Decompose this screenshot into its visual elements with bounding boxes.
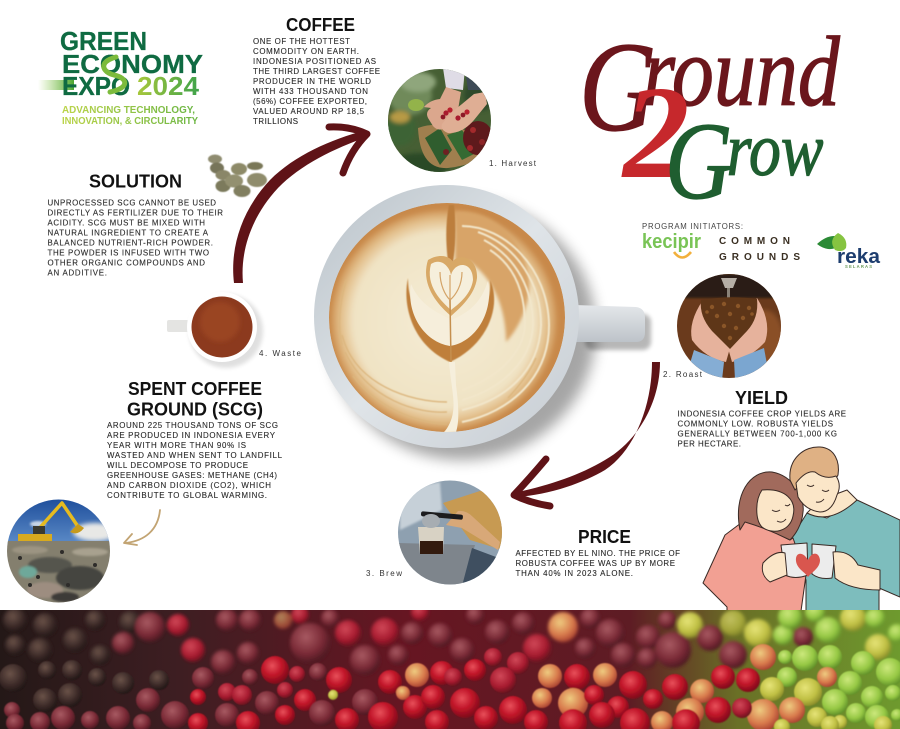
text block: solution: NATURAL INGREDIENT TO CREATE A: [48, 228, 209, 238]
text block: price: [516, 549, 680, 578]
arrow: roast to brew: [514, 362, 660, 506]
text block: coffee: INDONESIA POSITIONED AS: [253, 57, 376, 66]
text block: solution: UNPROCESSED SCG CANNOT BE USED: [48, 198, 216, 208]
label: waste: 4. Waste: [259, 349, 302, 358]
title: Ground 2 Grow: G: [665, 101, 733, 223]
label: harvest: 1. Harvest: [489, 159, 537, 168]
illustration: couple with mugs: [703, 447, 900, 611]
text block: coffee: ONE OF THE HOTTEST: [253, 37, 350, 46]
text block: spent coffee ground: WASTED AND WHEN SENT TO LANDFILL: [107, 451, 283, 460]
text block: coffee: (56%) COFFEE EXPORTED,: [253, 97, 367, 106]
logo: Green Economy Expo 2024: ADVANCING TECHNOLOGY,: [62, 104, 195, 116]
text block: yield: INDONESIA COFFEE CROP YIELDS ARE: [678, 410, 846, 418]
photo strip: coffee cherries: [0, 602, 900, 729]
text block: price: THAN 40% IN 2023 ALONE.: [516, 569, 633, 578]
logo: kecipir: kecipir: [642, 231, 701, 253]
text block: solution: DIRECTLY AS FERTILIZER DUE TO THEIR: [48, 208, 223, 218]
text block: spent coffee ground: YEAR WITH MORE THAN 90% IS: [107, 441, 246, 450]
logo: reka: [817, 233, 881, 269]
photo: waste coffee grounds cup: [167, 292, 263, 368]
mugs and heart: [781, 543, 808, 578]
logo: Green Economy Expo 2024: ECONOMY: [62, 49, 203, 79]
panel: coffee: [253, 14, 380, 126]
heading: solution: SOLUTION: [89, 170, 182, 192]
text block: coffee: WITH 433 THOUSAND TON: [253, 87, 368, 96]
central coffee cup: [314, 185, 651, 460]
text block: coffee: THE THIRD LARGEST COFFEE: [253, 67, 380, 76]
panel: price: [516, 526, 680, 578]
title: Ground 2 Grow: round: [642, 16, 841, 127]
label: brew: 3. Brew: [366, 569, 402, 578]
heading: yield: YIELD: [735, 387, 788, 408]
text block: yield: [678, 410, 846, 448]
woman hair: [738, 472, 803, 540]
arrow: tan curved: [124, 510, 160, 545]
title: Ground 2 Grow: row: [727, 109, 823, 192]
logo: reka: reka: [837, 246, 881, 268]
logo: Green Economy Expo 2024: 2024: [137, 71, 200, 101]
text block: solution: BALANCED NUTRIENT-RICH POWDER.: [48, 238, 213, 248]
text block: spent coffee ground: AND CARBON DIOXIDE (CO2), WHICH: [107, 481, 271, 490]
text block: coffee: TRILLIONS: [253, 117, 298, 126]
heading: spent coffee ground: [127, 378, 263, 420]
text block: price: ROBUSTA COFFEE WAS UP BY MORE: [516, 559, 675, 568]
logo: common grounds: [719, 236, 800, 263]
man body: [792, 500, 900, 611]
woman face: [757, 490, 794, 531]
icon: green coffee beans: [208, 154, 267, 197]
photo: roast: [677, 274, 783, 380]
text block: spent coffee ground: AROUND 225 THOUSAND TONS OF SCG: [107, 421, 278, 430]
text block: spent coffee ground: CONTRIBUTE TO GLOBAL WARMING.: [107, 491, 267, 500]
photo: brew: [397, 480, 504, 586]
heading: spent coffee ground: SPENT COFFEE: [128, 378, 262, 399]
panel: yield: [678, 387, 846, 448]
text block: coffee: PRODUCER IN THE WORLD: [253, 77, 371, 86]
logo: common grounds: COMMON: [719, 236, 790, 247]
logo: Green Economy Expo 2024: GREEN: [60, 26, 147, 56]
cup handle: [574, 305, 645, 342]
logo: reka: SELARAS: [845, 264, 872, 269]
program initiators: [642, 222, 881, 269]
woman body: [703, 520, 806, 611]
text block: spent coffee ground: WILL DECOMPOSE TO PRODUCE: [107, 461, 248, 470]
panel: solution: [48, 170, 223, 278]
label: roast: 2. Roast: [663, 370, 703, 379]
text block: price: AFFECTED BY EL NINO. THE PRICE OF: [516, 549, 680, 558]
text block: solution: ACIDITY. SCG MUST BE MIXED WITH: [48, 218, 205, 228]
arrow: waste to harvest: [233, 127, 367, 283]
logo: common grounds: GROUNDS: [719, 252, 800, 263]
title: Ground 2 Grow: G: [579, 16, 657, 158]
blurred back berries: [2, 610, 900, 674]
logo: Green Economy Expo 2024: EXPO: [62, 71, 130, 101]
text block: solution: [48, 198, 223, 278]
text block: yield: COMMONLY LOW. ROBUSTA YIELDS: [678, 420, 833, 428]
text block: coffee: [253, 37, 380, 126]
latte art: [329, 203, 565, 432]
man hair and face: [790, 447, 838, 490]
text block: coffee: VALUED AROUND RP 18,5: [253, 107, 365, 116]
heading: price: PRICE: [578, 526, 631, 547]
sharp front berries: [0, 644, 900, 729]
heading: coffee: COFFEE: [286, 14, 355, 35]
text block: coffee: COMMODITY ON EARTH.: [253, 47, 359, 56]
photo: harvest: [388, 69, 491, 172]
text block: solution: AN ADDITIVE.: [48, 268, 107, 278]
text block: solution: OTHER ORGANIC COMPOUNDS AND: [48, 258, 205, 268]
photo: landfill: [7, 499, 117, 603]
heading: spent coffee ground: GROUND (SCG): [127, 398, 263, 420]
title: Ground 2 Grow: 2: [621, 58, 690, 206]
program initiators: PROGRAM INITIATORS:: [642, 222, 743, 231]
text block: solution: THE POWDER IS INFUSED WITH TWO: [48, 248, 209, 258]
text block: spent coffee ground: [107, 421, 283, 500]
text block: spent coffee ground: ARE PRODUCED IN INDONESIA EVERY: [107, 431, 276, 440]
panel: spent coffee ground: [107, 378, 283, 500]
text block: yield: PER HECTARE.: [678, 440, 741, 448]
logo: Green Economy Expo 2024: [38, 26, 203, 127]
logo: Green Economy Expo 2024: INNOVATION, & CIRCULARITY: [62, 115, 198, 127]
text block: yield: GENERALLY BETWEEN 700-1,000 KG: [678, 430, 837, 438]
title: Ground 2 Grow: [579, 16, 841, 223]
text block: spent coffee ground: GREENHOUSE GASES: METHANE (CH4): [107, 471, 277, 480]
